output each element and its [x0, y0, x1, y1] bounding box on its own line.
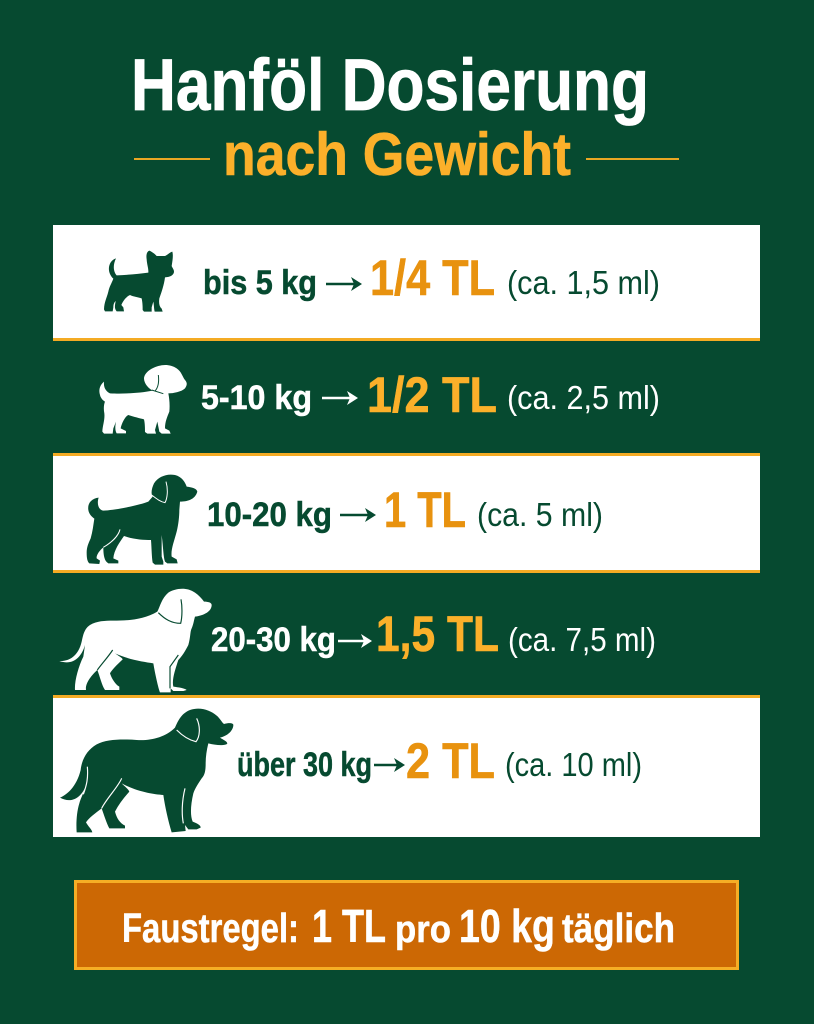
label: weight: 5-10 kg [201, 379, 312, 417]
panel: row 20-30 kg [53, 573, 760, 698]
label: weight: über 30 kg [237, 746, 372, 784]
panel: row bis 5 kg [53, 225, 760, 341]
millilitres: (ca. 5 ml) [477, 496, 603, 533]
callout: rule of thumb: 1 TL [312, 900, 386, 952]
icon: very large dog [60, 709, 233, 832]
icon: very small dog [104, 251, 174, 312]
callout: rule of thumb: 10 kg [459, 900, 555, 952]
dose: 1/4 TL [370, 250, 495, 306]
arrow [374, 764, 397, 766]
label: weight: 20-30 kg [211, 621, 336, 659]
millilitres: (ca. 2,5 ml) [507, 379, 660, 416]
millilitres: (ca. 10 ml) [505, 746, 642, 783]
millilitres: (ca. 7,5 ml) [508, 621, 656, 658]
arrow [322, 397, 350, 399]
arrow [340, 514, 368, 516]
icon: medium dog [87, 475, 197, 565]
callout: rule of thumb: täglich [562, 905, 675, 951]
title: nach Gewicht [223, 121, 571, 188]
dose: 1,5 TL [376, 606, 499, 662]
dose: 1/2 TL [367, 367, 497, 423]
title: Hanföl Dosierung [131, 45, 649, 126]
callout: rule of thumb: Faustregel: [122, 905, 299, 951]
label: weight: bis 5 kg [203, 264, 317, 302]
millilitres: (ca. 1,5 ml) [507, 264, 660, 301]
panel: row 10-20 kg [53, 456, 760, 573]
label: weight: 10-20 kg [207, 496, 332, 534]
panel: row über 30 kg [53, 698, 760, 837]
dose: 1 TL [384, 482, 466, 538]
callout: rule of thumb: pro [395, 909, 451, 951]
icon: small dog [99, 365, 187, 434]
arrow [326, 283, 354, 285]
callout: rule of thumb [76, 882, 738, 968]
icon: large dog [59, 589, 212, 692]
panel: row 5-10 kg [53, 341, 760, 456]
title [131, 45, 679, 188]
arrow [338, 640, 364, 642]
dose: 2 TL [406, 733, 495, 789]
